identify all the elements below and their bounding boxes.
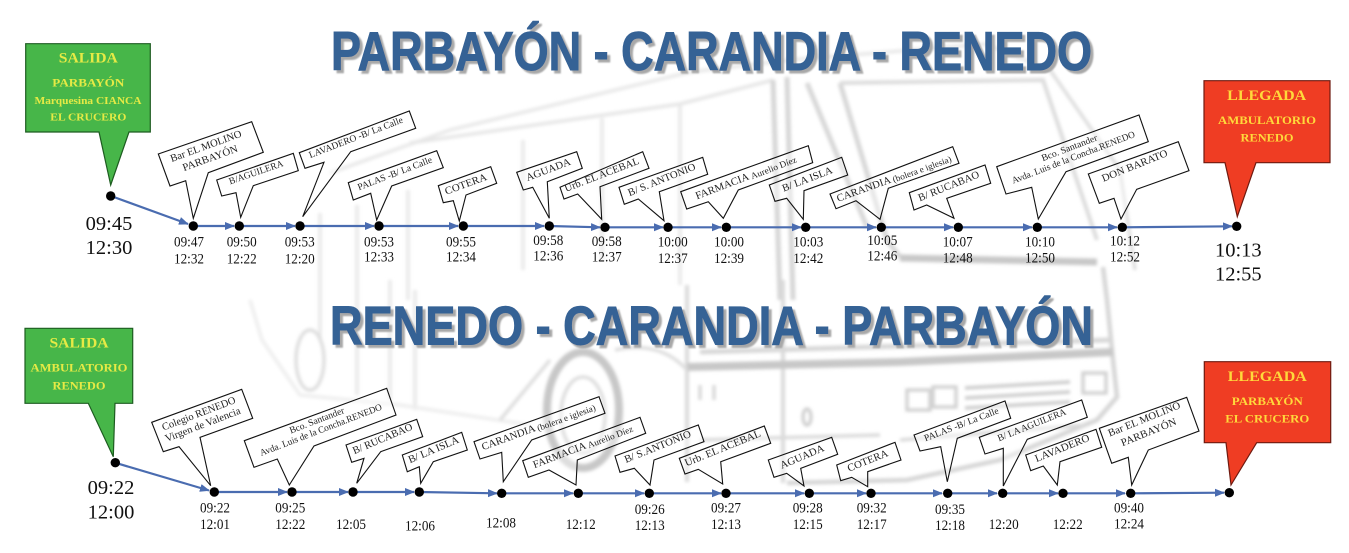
stop labels: return: FARMACIA Aurelio Díez — [532, 423, 634, 471]
title: Renedo - Carandia - Parbayón: RENEDO - CARANDIA - PARBAYÓN — [330, 296, 1093, 356]
callout: salida Parbayón: PARBAYÓN — [52, 76, 125, 90]
times: return: 12:13 — [635, 518, 665, 534]
times: outbound: 12:42 — [793, 251, 823, 267]
stop labels: outbound: Bco. Santander — [1040, 133, 1100, 164]
times: return: 09:28 — [793, 501, 823, 517]
callout: llegada Parbayón: EL CRUCERO — [1225, 414, 1309, 426]
route stops: outbound dots — [106, 191, 1241, 232]
stop labels: return: LAVADERO — [1033, 433, 1092, 465]
times: outbound: 10:13 — [1215, 240, 1262, 262]
times: return: 09:22 — [88, 477, 134, 499]
stop labels: return: PARBAYÓN — [1119, 416, 1179, 449]
times: outbound: 10:07 — [943, 235, 973, 251]
times: outbound: 12:32 — [174, 251, 204, 267]
stop labels: return: Colegio RENEDO — [161, 395, 238, 433]
callout: llegada Parbayón: PARBAYÓN — [1232, 394, 1304, 408]
stop labels: outbound: LAVADERO -B/ La Calle — [308, 116, 405, 161]
times: outbound: 12:46 — [867, 249, 898, 265]
stop labels: return: Virgen de Valencia — [164, 406, 243, 445]
stop labels: return: Avda. Luis de la Concha.RENEDO — [259, 403, 384, 459]
callout: salida Ambulatorio Renedo — [25, 328, 133, 457]
stop labels: return: Bco. Santander — [288, 406, 347, 436]
stop labels: outbound: B/ RUCABAO — [917, 169, 982, 204]
times: return: 12:01 — [200, 517, 230, 533]
times: outbound: 10:12 — [1110, 234, 1140, 250]
times: outbound: 09:53 — [364, 235, 394, 251]
stop labels: return: Bar EL MOLINO — [1107, 400, 1183, 439]
title: Parbayón - Carandia - Renedo: PARBAYÓN - CARANDIA - RENEDO — [331, 21, 1092, 82]
times: outbound: 09:53 — [285, 235, 315, 251]
times: outbound: 12:52 — [1110, 250, 1140, 266]
stop labels: outbound — [158, 111, 1189, 221]
callout: llegada Parbayón: LLEGADA — [1228, 369, 1307, 385]
times: outbound: 10:00 — [714, 235, 744, 251]
stop labels: return: B/ LA AGUILERA — [996, 408, 1068, 444]
stop labels: outbound: B/AGUILERA — [228, 159, 285, 187]
times: return: 12:22 — [275, 517, 305, 533]
times: outbound: 12:20 — [285, 251, 315, 267]
stop labels: return — [152, 388, 1199, 487]
stop labels: outbound: COTERA — [444, 172, 489, 198]
callout: llegada Parbayón — [1204, 362, 1331, 485]
times: return: 09:22 — [200, 501, 230, 517]
times: outbound: 12:22 — [227, 251, 257, 267]
times: return: 12:06 — [405, 519, 435, 535]
route line: outbound timeline with arrows — [111, 196, 1232, 227]
times: outbound: 12:30 — [86, 237, 132, 259]
stop labels: outbound: PARBAYÓN — [181, 143, 240, 174]
times: outbound: 09:45 — [86, 213, 132, 235]
route stops: return dots — [111, 458, 1234, 498]
stop labels: outbound: B/ LA ISLA — [781, 165, 835, 194]
times: outbound: 12:55 — [1215, 264, 1262, 286]
callout: llegada Ambulatorio Renedo: LLEGADA — [1227, 88, 1306, 104]
stop labels: outbound: CARANDIA (bolera e iglesia) — [835, 153, 953, 205]
times: return: 09:35 — [935, 502, 965, 518]
times: outbound: 10:05 — [867, 233, 897, 249]
route line: return timeline with arrows — [115, 463, 1224, 493]
times: return — [88, 477, 1144, 535]
times: return: 12:24 — [1114, 516, 1144, 532]
callout: salida Parbayón — [26, 44, 150, 185]
times: outbound: 12:50 — [1025, 251, 1055, 267]
times: outbound: 10:00 — [658, 235, 688, 251]
stop labels: return: B/ S.ANTONIO — [623, 429, 693, 466]
callout: salida Parbayón: EL CRUCERO — [50, 113, 126, 124]
times: outbound: 12:33 — [364, 250, 394, 266]
stop labels: outbound: AGUADA — [525, 157, 573, 184]
times: outbound: 10:03 — [793, 235, 823, 251]
stop labels: return: PALAS -B/ La Calle — [923, 407, 1000, 444]
times: outbound: 12:37 — [592, 250, 622, 266]
stop labels: return: Urb. EL ACEBAL — [683, 429, 763, 469]
stop labels: return: B/ LA ISLA — [407, 435, 461, 466]
background: faded bus illustration — [250, 44, 1135, 483]
callout: salida Ambulatorio Renedo: AMBULATORIO — [30, 363, 128, 375]
times: outbound: 09:55 — [446, 235, 476, 251]
times: outbound: 12:36 — [533, 249, 564, 265]
callout: llegada Ambulatorio Renedo — [1204, 81, 1330, 217]
times: return: 09:32 — [857, 501, 887, 517]
stop labels: return: B/ RUCABAO — [351, 422, 415, 457]
callout: llegada Ambulatorio Renedo: AMBULATORIO — [1218, 115, 1316, 127]
times: outbound: 12:34 — [446, 250, 476, 266]
stop labels: outbound: Bar EL MOLINO — [169, 129, 244, 165]
callout: llegada Ambulatorio Renedo: RENEDO — [1240, 133, 1294, 145]
times: return: 12:22 — [1053, 517, 1083, 533]
callout: salida Parbayón: Marquesina CIANCA — [34, 96, 142, 107]
times: outbound: 09:58 — [592, 234, 622, 250]
times: outbound: 09:47 — [174, 235, 204, 251]
times: return: 12:17 — [857, 517, 887, 533]
stop labels: outbound: FARMACIA Aurelio Díez — [694, 154, 798, 202]
times: return: 09:27 — [711, 501, 741, 517]
times: return: 12:13 — [711, 517, 741, 533]
times: return: 12:15 — [793, 517, 823, 533]
stop labels: return: AGUADA — [779, 443, 827, 472]
times: return: 12:08 — [486, 516, 516, 532]
times: return: 12:12 — [566, 517, 596, 533]
times: outbound — [86, 213, 1262, 286]
times: return: 12:18 — [935, 518, 965, 534]
times: outbound: 09:58 — [533, 233, 563, 249]
times: return: 12:05 — [336, 517, 366, 533]
times: outbound: 12:48 — [943, 251, 973, 267]
stop labels: outbound: DON BARATO — [1100, 148, 1170, 185]
times: return: 09:40 — [1114, 500, 1144, 516]
times: return: 09:26 — [635, 502, 665, 518]
times: return: 09:25 — [275, 501, 305, 517]
stop labels: outbound: Avda. Luis de la Concha.RENEDO — [1011, 130, 1137, 186]
stop labels: return: COTERA — [846, 448, 890, 475]
times: return: 12:20 — [989, 517, 1019, 533]
times: outbound: 10:10 — [1025, 235, 1055, 251]
times: outbound: 12:37 — [658, 251, 688, 267]
stop labels: outbound: Urb. EL ACEBAL — [563, 156, 641, 195]
callout: salida Parbayón: SALIDA — [59, 51, 118, 67]
stop labels: outbound: B/ S. ANTONIO — [627, 162, 698, 199]
callout: salida Ambulatorio Renedo: RENEDO — [52, 380, 106, 392]
times: outbound: 09:50 — [227, 235, 257, 251]
stop labels: outbound: PALAS -B/ La Calle — [357, 156, 434, 193]
stop labels: return: CARANDIA (bolera e iglesia) — [480, 402, 597, 453]
times: return: 12:00 — [88, 501, 134, 523]
times: outbound: 12:39 — [714, 251, 744, 267]
callout: salida Ambulatorio Renedo: SALIDA — [50, 336, 109, 352]
